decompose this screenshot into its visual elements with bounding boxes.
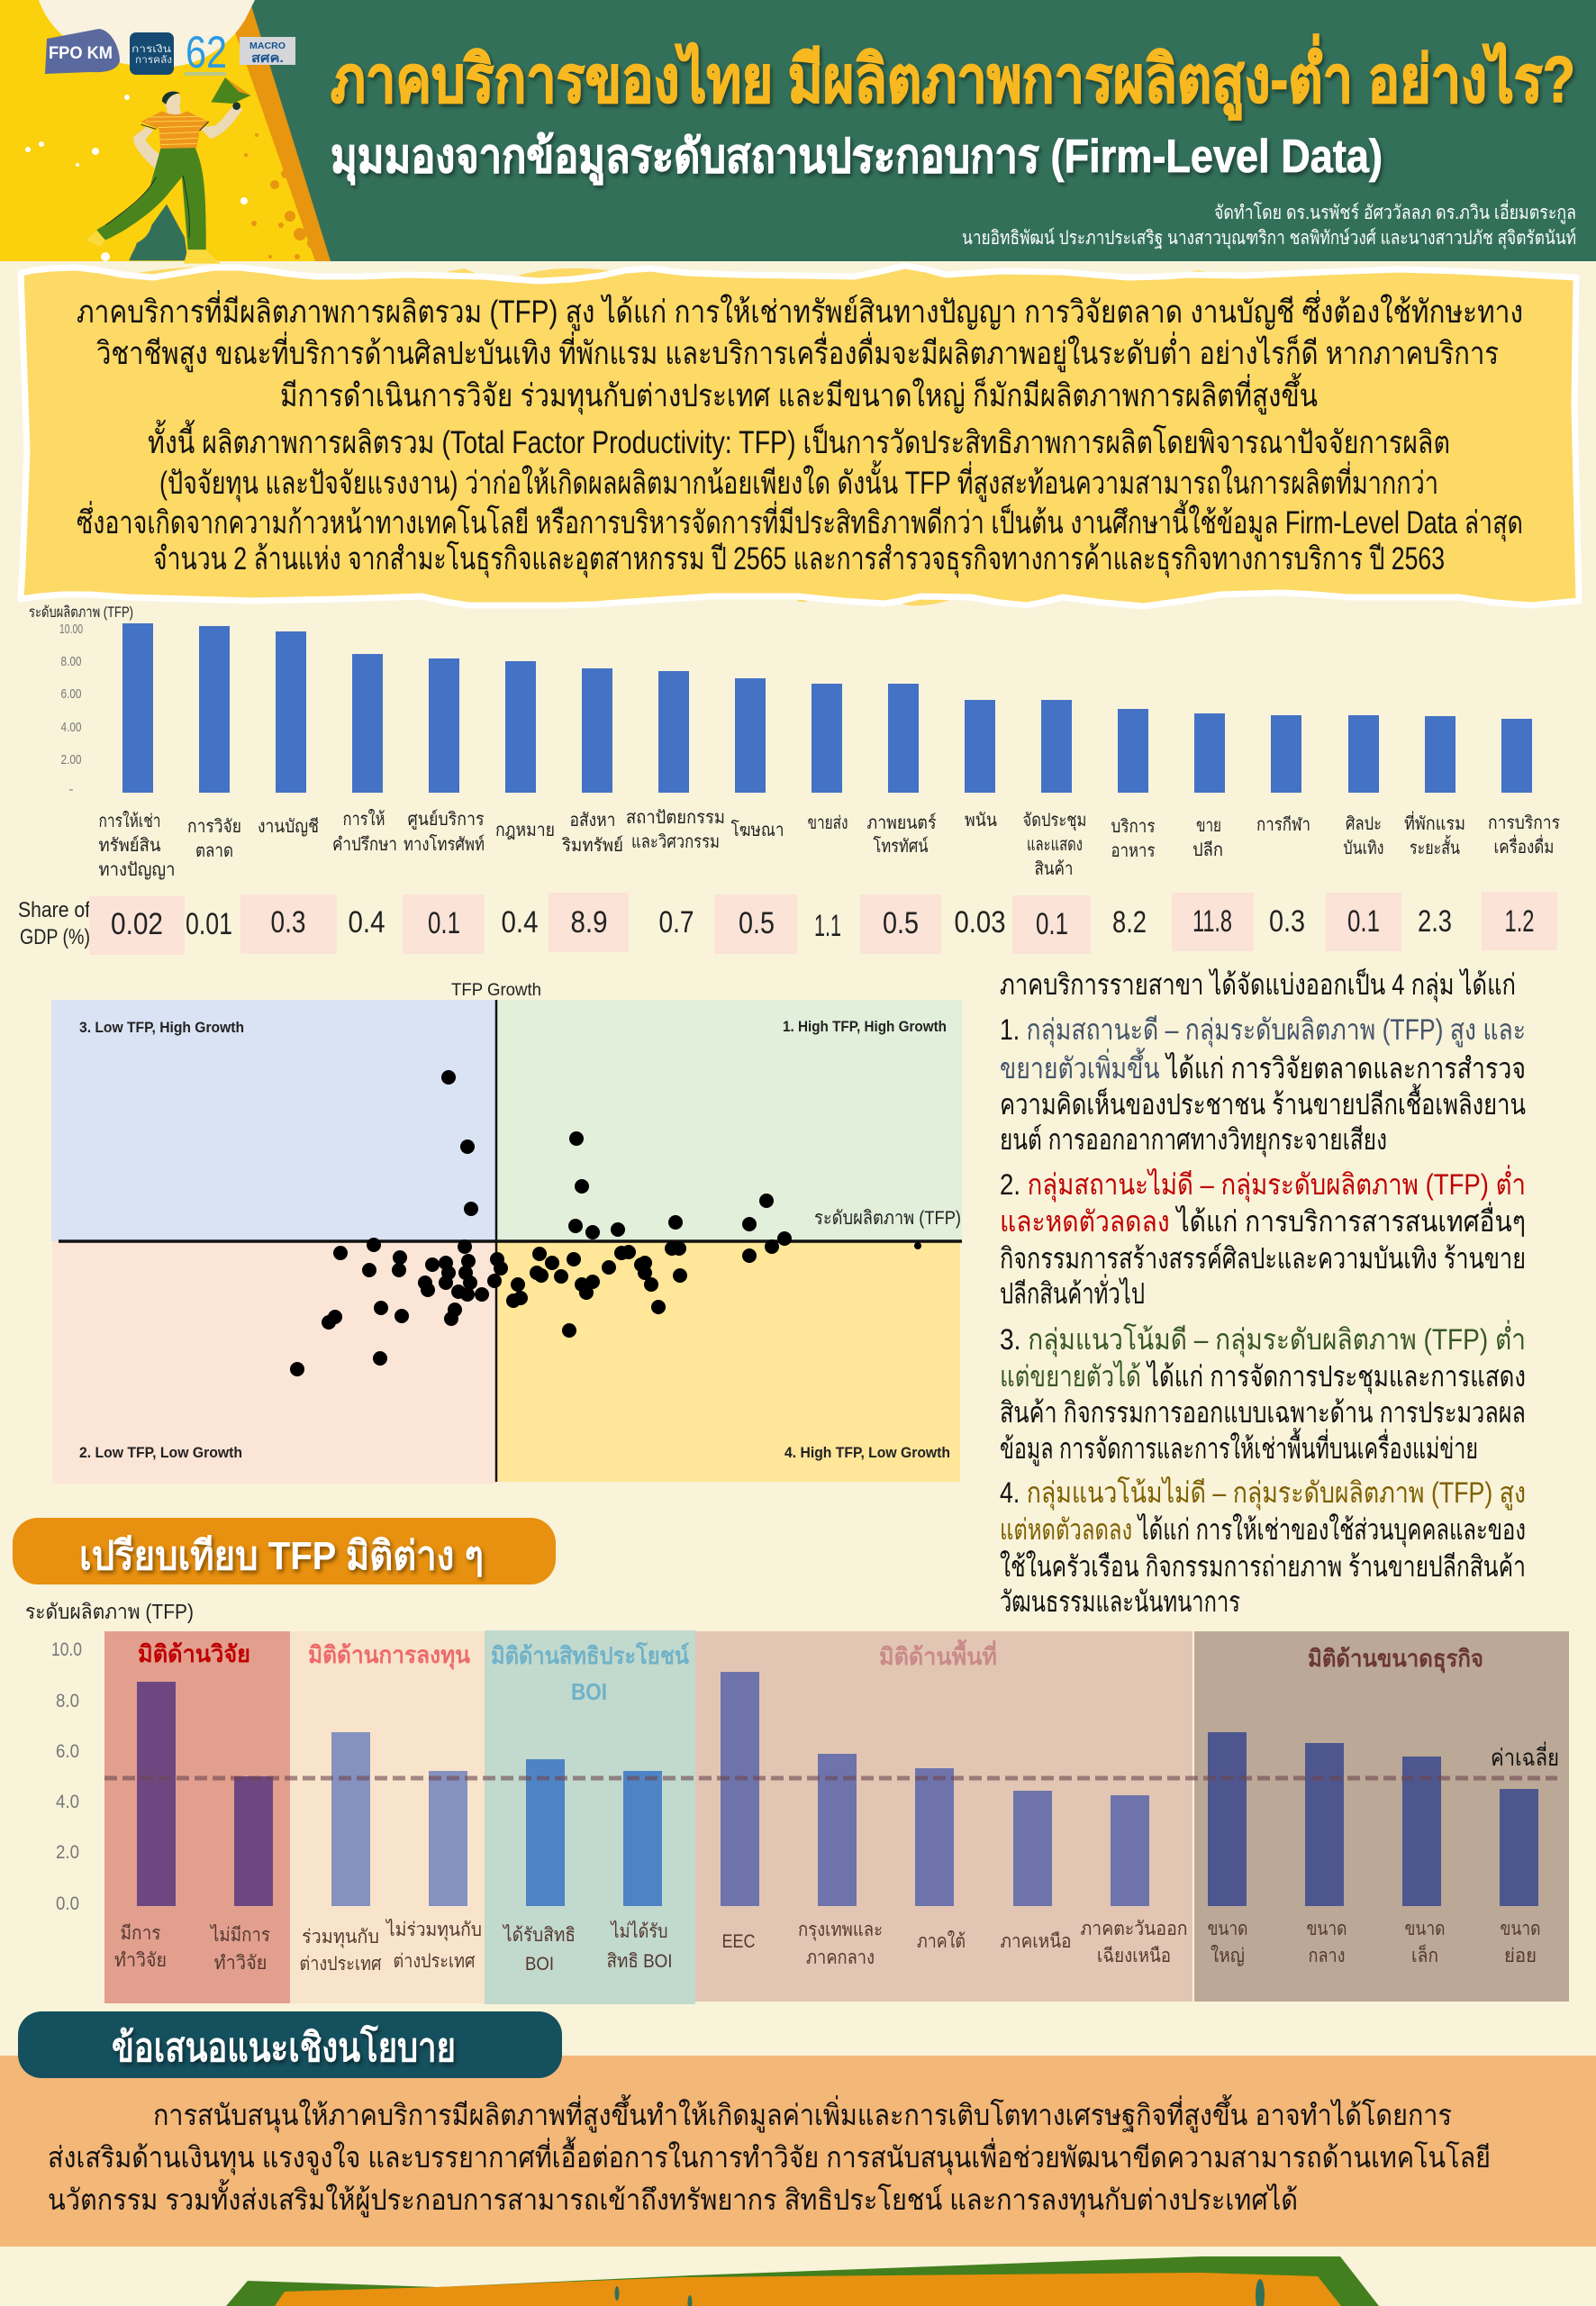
category labels: ต่างประเทศ [393, 1951, 476, 1972]
share of GDP row: 1.2 [1504, 904, 1535, 939]
category labels: บริการ [1111, 817, 1156, 837]
category labels: คำปรึกษา [332, 835, 397, 855]
subtitle: มุมมองจากข้อมูลระดับสถานประกอบการ (Firm-Level Data) [331, 131, 1383, 186]
group 1: ขยายตัวเพิ่มขึ้น ได้แก่ การวิจัยตลาดและการสำรวจ [1000, 1048, 1526, 1085]
category labels: กรุงเทพและ [798, 1920, 883, 1941]
category labels: การกีฬา [1256, 815, 1310, 835]
group 3 [1000, 1320, 1526, 1466]
share of GDP row: 8.2 [1112, 905, 1147, 940]
band titles: มิติด้านพื้นที่ [879, 1639, 997, 1670]
category labels: สิทธิ BOI [607, 1951, 672, 1972]
quadrant labels: 4. High TFP, Low Growth [784, 1444, 950, 1461]
logo: finance magazine: การเงิน [131, 44, 172, 55]
bar chart: TFP by dimension [25, 1600, 1569, 2004]
axis ticks: 0.0 [56, 1893, 79, 1914]
category labels: ภาคใต้ [917, 1930, 966, 1952]
share of GDP row: 11.8 [1192, 904, 1232, 939]
share of GDP row: Share of [18, 898, 90, 922]
share of GDP row [18, 892, 1557, 955]
band titles: มิติด้านการลงทุน [308, 1641, 470, 1670]
heading pill: compare TFP: เปรียบเทียบ TFP มิติต่าง ๆ [79, 1534, 484, 1578]
group 1 [1000, 1013, 1526, 1158]
heading pill: policy recommendations [18, 2011, 562, 2078]
category labels: ขาย [1196, 816, 1221, 836]
yellow overlaps beyond the torn edge [126, 267, 1578, 605]
category labels: ศูนย์บริการ [407, 809, 485, 831]
category labels: ไม่มีการ [209, 1924, 270, 1946]
category labels: ทำวิจัย [214, 1953, 267, 1974]
logo: MACRO: MACRO [249, 41, 286, 51]
heading pill: compare TFP [13, 1518, 556, 1584]
axis title: ระดับผลิตภาพ (TFP) [29, 604, 133, 621]
category labels: EEC [722, 1931, 755, 1952]
axis ticks: 6.00 [61, 686, 81, 702]
share of GDP row: 0.1 [428, 906, 460, 940]
category labels: กลาง [1308, 1946, 1346, 1966]
category labels: การวิจัย [187, 817, 241, 837]
share of GDP row: GDP (%) [20, 925, 90, 949]
category labels: ขนาด [1306, 1919, 1347, 1939]
category labels: เฉียงเหนือ [1097, 1946, 1171, 1966]
category labels: ปลีก [1192, 840, 1223, 860]
category labels: ภาคกลาง [806, 1947, 875, 1968]
category labels: จัดประชุม [1023, 811, 1086, 831]
category labels: ภาพยนตร์ [866, 813, 937, 833]
category labels: การบริการ [1488, 813, 1560, 833]
quadrant labels: 3. Low TFP, High Growth [79, 1019, 244, 1036]
share of GDP row: 1.1 [814, 909, 841, 943]
category labels: การให้เช่า [99, 811, 160, 831]
category labels: ทำวิจัย [114, 1950, 167, 1971]
white specks [25, 95, 248, 261]
category labels: ระยะสั้น [1410, 835, 1460, 858]
share of GDP row: 2.3 [1418, 904, 1452, 939]
group 2: และหดตัวลดลง ได้แก่ การบริการสารสนเทศอื่นๆ [1000, 1202, 1526, 1238]
text block: recommendations: นวัตกรรม รวมทั้งส่งเสริมให้ผู้ประกอบการสามารถเข้าถึงทรัพยากร สิทธิประโยชน์ และการลงทุนกับต่างประเทศได้ [48, 2179, 1298, 2218]
text block: key findings [77, 290, 1523, 414]
category labels: ขายส่ง [807, 813, 848, 833]
axis ticks: 6.0 [56, 1741, 79, 1762]
footer paper shape [226, 2256, 1379, 2306]
axis ticks: 4.0 [56, 1792, 79, 1812]
quadrant backgrounds [51, 1000, 962, 1484]
decorative orange speckles [244, 133, 319, 259]
band titles: BOI [571, 1678, 607, 1705]
bar chart: TFP level by service sub-sector [29, 604, 1560, 880]
share of GDP row: 0.3 [1269, 904, 1305, 939]
band titles: มิติด้านขนาดธุรกิจ [1308, 1645, 1483, 1674]
axis ticks: 10.0 [51, 1639, 82, 1660]
icon: person with megaphone [86, 77, 250, 264]
category labels: และแสดง [1027, 835, 1083, 855]
text block: key findings: มีการดำเนินการวิจัย ร่วมทุนกับต่างประเทศ และมีขนาดใหญ่ ก็มักมีผลิตภาพการผลิตที่สูงขึ้น [280, 372, 1318, 414]
category labels: พนัน [965, 811, 997, 831]
category labels: และวิศวกรรม [631, 832, 720, 852]
panel: summary on torn yellow paper [21, 266, 1579, 606]
category labels: ที่พักแรม [1404, 811, 1465, 834]
category labels: สถาปัตยกรรม [626, 808, 725, 828]
category labels: มีการ [121, 1923, 160, 1944]
category labels: ไม่ได้รับ [610, 1920, 668, 1942]
logo: finance magazine: การคลัง [135, 55, 172, 66]
category labels: ต่างประเทศ [299, 1954, 382, 1975]
axis ticks: 2.00 [61, 752, 81, 767]
axis ticks [59, 622, 83, 797]
authors [962, 199, 1576, 250]
category labels: ศิลปะ [1346, 814, 1382, 834]
text block: four service groups [1000, 967, 1526, 1618]
quadrant labels: 1. High TFP, High Growth [783, 1018, 947, 1035]
category labels: ขนาด [1207, 1919, 1248, 1939]
category labels: ย่อย [1504, 1946, 1537, 1966]
logo: FPO KM: FPO KM [49, 44, 113, 63]
bars [137, 1672, 1538, 1906]
category labels: กฎหมาย [495, 821, 555, 840]
band titles [138, 1639, 1483, 1705]
category labels: โฆษณา [731, 820, 784, 840]
axis title: TFP Growth: TFP Growth [451, 981, 541, 1000]
scatter points [290, 1070, 921, 1376]
category labels: งานบัญชี [258, 817, 319, 837]
category labels: ทางโทรศัพท์ [404, 834, 485, 855]
share of GDP row: 0.02 [111, 907, 163, 941]
logo: MACRO: สศค. [251, 50, 284, 65]
category labels: อาหาร [1111, 841, 1156, 861]
axis title: TFP level: ระดับผลิตภาพ (TFP) [814, 1208, 961, 1229]
share of GDP row: 0.3 [270, 905, 306, 940]
quadrant labels: 2. Low TFP, Low Growth [79, 1444, 242, 1461]
axis ticks: 8.00 [61, 654, 81, 669]
text block: recommendations [48, 2094, 1491, 2218]
category labels: BOI [525, 1954, 554, 1975]
category labels: อสังหา [569, 811, 616, 831]
group 2 [1000, 1165, 1526, 1310]
text block: TFP definition [77, 419, 1523, 577]
category labels: ทางปัญญา [99, 860, 175, 880]
average line: ค่าเฉลี่ย [1491, 1741, 1559, 1771]
category labels: ภาคตะวันออก [1081, 1919, 1187, 1939]
text block: recommendations: การสนับสนุนให้ภาคบริการมีผลิตภาพที่สูงขึ้นทำให้เกิดมูลค่าเพิ่มและการเติบโตทางเศรษฐกิจที่สูงขึ้น อาจทำได้โดยการ [153, 2094, 1452, 2133]
category labels: ขนาด [1405, 1919, 1445, 1939]
share of GDP row: 0.5 [883, 906, 919, 940]
bars [122, 623, 1532, 793]
group 1: ยนต์ การออกอากาศทางวิทยุกระจายเสียง [1000, 1123, 1387, 1158]
axis ticks: 2.0 [56, 1842, 79, 1863]
category labels [114, 1919, 1540, 1975]
axis title: ระดับผลิตภาพ (TFP) [25, 1600, 194, 1623]
band titles: มิติด้านวิจัย [138, 1640, 250, 1667]
category labels: เครื่องดื่ม [1493, 834, 1555, 858]
share of GDP row: 0.4 [348, 905, 385, 940]
share of GDP row: 0.7 [659, 905, 694, 940]
category labels: ร่วมทุนกับ [302, 1927, 379, 1948]
logo: MACRO [240, 37, 295, 65]
category labels [99, 808, 1560, 880]
category labels: ภาคเหนือ [1000, 1931, 1072, 1952]
axis ticks: 8.0 [56, 1691, 79, 1711]
logo: finance magazine [130, 32, 174, 75]
share of GDP row: 0.4 [501, 905, 539, 940]
group 4: วัฒนธรรมและนันทนาการ [1000, 1585, 1240, 1618]
band titles: มิติด้านสิทธิประโยชน์ [491, 1641, 689, 1669]
category labels: บันเทิง [1344, 839, 1383, 858]
panel: policy recommendations [0, 2011, 1596, 2247]
axis ticks: 4.00 [61, 720, 81, 735]
heading pill: policy recommendations: ข้อเสนอแนะเชิงนโยบาย [112, 2023, 456, 2070]
category labels: ใหญ่ [1211, 1945, 1245, 1966]
axis ticks: 10.00 [59, 622, 83, 637]
share of GDP row: 8.9 [571, 905, 607, 940]
share of GDP row: 0.1 [1036, 907, 1068, 941]
logos [45, 27, 295, 77]
axis ticks: - [68, 782, 74, 797]
share of GDP row: 0.1 [1347, 904, 1380, 939]
category labels: ทรัพย์สิน [99, 835, 161, 856]
category labels: เล็ก [1411, 1943, 1438, 1966]
group 2: 2. กลุ่มสถานะไม่ดี – กลุ่มระดับผลิตภาพ (TFP) ต่ำ [1000, 1165, 1526, 1203]
quadrant scatter chart [51, 981, 962, 1484]
category labels: สินค้า [1034, 859, 1074, 879]
share of GDP row: 0.5 [739, 906, 775, 940]
share of GDP row: 0.01 [186, 907, 232, 941]
category labels: ได้รับสิทธิ [502, 1924, 576, 1946]
quadrant labels [79, 1018, 950, 1461]
category labels: ขนาด [1501, 1919, 1540, 1939]
group 4 [1000, 1476, 1526, 1618]
group 2: ปลีกสินค้าทั่วไป [1000, 1274, 1145, 1310]
category labels: การให้ [342, 809, 385, 830]
logo: FPO KM [45, 29, 120, 74]
dimension bands [104, 1630, 1569, 2004]
category labels: ไม่ร่วมทุนกับ [385, 1919, 482, 1941]
share of GDP row: 0.03 [955, 905, 1005, 940]
category labels: ตลาด [195, 841, 233, 861]
category labels: ริมทรัพย์ [562, 835, 623, 856]
group 3: 3. กลุ่มแนวโน้มดี – กลุ่มระดับผลิตภาพ (TFP) ต่ำ [1000, 1320, 1526, 1357]
category labels: โทรทัศน์ [874, 836, 929, 857]
axis ticks [51, 1639, 82, 1914]
header banner [0, 0, 1596, 261]
logo: 62 anniversary: 62 [186, 27, 227, 77]
